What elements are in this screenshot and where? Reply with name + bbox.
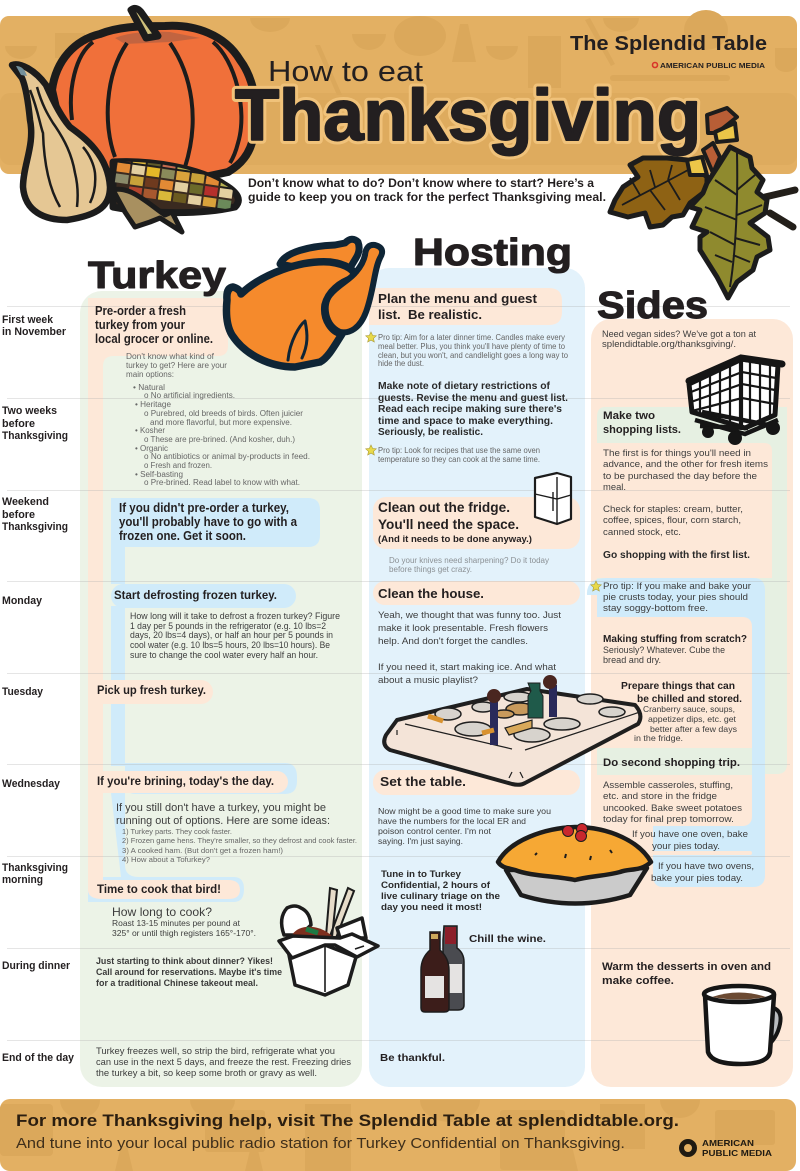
oven note: [632, 829, 754, 884]
shopping details: meal.: [603, 482, 626, 493]
fridge heading: (And it needs to be done anyway.): [378, 534, 532, 545]
pre-order heading: turkey from your: [95, 318, 185, 332]
turkey options list: o Pre-brined. Read label to know with what.: [144, 478, 300, 487]
text: hosting column: [378, 291, 569, 1064]
ER note: Now might be a good time to make sure you: [378, 806, 551, 816]
wine heading: Chill the wine.: [469, 933, 546, 945]
frozen turkey callout: If you didn't pre-order a turkey,: [119, 501, 289, 515]
turkey options list: o Fresh and frozen.: [144, 461, 212, 470]
dessert heading: [602, 961, 771, 987]
dietary note: [378, 380, 568, 438]
illustration: pie: [498, 824, 651, 904]
plan heading: [378, 291, 538, 322]
plan heading: list. Be realistic.: [378, 307, 482, 322]
timeline labels: End of the day: [2, 1052, 75, 1064]
timeline labels: in November: [2, 326, 67, 338]
shopping details: coffee, spices, flour, corn starch,: [603, 515, 741, 526]
defrost details: cool water (e.g. 10 lbs=5 hours, 20 lbs=10 hours). Be: [130, 640, 330, 650]
casserole note: [603, 780, 742, 825]
frozen turkey callout: frozen one. Get it soon.: [119, 529, 246, 543]
title: Thanksgiving: Thanksgiving: [235, 76, 701, 156]
casserole note: uncooked. Bake sweet potatoes: [603, 803, 742, 814]
last-resort ideas: 1) Turkey parts. They cook faster.: [122, 827, 232, 836]
defrost details: 1 day per 5 pounds in the refrigerator (e.g. 10 lbs=2: [130, 621, 326, 631]
shopping details: Check for staples: cream, butter,: [603, 504, 743, 515]
ER note: saying. I'm just saying.: [378, 836, 463, 846]
oven note: bake your pies today.: [651, 873, 743, 884]
frozen turkey callout: you'll probably have to go with a: [119, 515, 298, 529]
turkey options list: o These are pre-brined. (And kosher, duh.): [144, 435, 295, 444]
chill note: [621, 680, 742, 743]
house note: Yeah, we thought that was funny too. Just: [378, 610, 561, 621]
oven note: If you have one oven, bake: [632, 829, 748, 840]
title: how to eat: How to eat: [268, 56, 423, 88]
leftovers note: the turkey a bit, so keep some broth or gravy as well.: [96, 1068, 317, 1079]
stuffing note: [603, 633, 747, 665]
turkey options list: o No antibiotics or animal by-products in feed.: [144, 452, 310, 461]
turkey options list: • Natural: [133, 383, 165, 392]
logo: The Splendid Table: AMERICAN PUBLIC MEDIA: [660, 61, 766, 70]
chill note: in the fridge.: [634, 733, 683, 743]
timeline labels: before: [2, 418, 35, 430]
oven note: your pies today.: [652, 841, 720, 852]
house note: make it look presentable. Fresh flowers: [378, 623, 548, 634]
pre-order heading: [95, 304, 213, 346]
table heading: Set the table.: [380, 775, 466, 789]
defrost details: sure to change the cool water every half an hour.: [130, 650, 318, 660]
panel: hosting backgrounds: [369, 268, 585, 1087]
pie crust tip: stay soggy-bottom free.: [603, 603, 708, 614]
shopping details: to be purchased the day before the: [603, 471, 757, 482]
title: Thanksgiving: Thanksgiving: [235, 76, 701, 156]
brining heading: If you're brining, today's the day.: [97, 776, 274, 788]
timeline labels: [2, 314, 75, 1064]
vegan note: splendidtable.org/thanksgiving/.: [602, 339, 736, 349]
heading: Sides: Sides: [597, 285, 708, 327]
radio note: [381, 869, 500, 913]
last-resort ideas: 3) A cooked ham. (But don't get a frozen ham!): [122, 846, 284, 855]
house note: [378, 610, 561, 686]
chill note: appetizer dips, etc. get: [648, 714, 737, 724]
cook time: [112, 905, 256, 938]
illustration: roast turkey: [227, 239, 382, 367]
pro tip one: hide the dust.: [378, 359, 424, 368]
timeline labels: First week: [2, 314, 54, 326]
dinner note: Call around for reservations. Maybe it's time: [96, 967, 282, 978]
turkey options list: • Kosher: [135, 426, 165, 435]
shopping heading: [603, 410, 681, 436]
timeline labels: Thanksgiving: [2, 430, 68, 442]
turkey options list: Don't know what kind of: [126, 352, 215, 361]
chill note: Cranberry sauce, soups,: [643, 704, 735, 714]
thankful heading: Be thankful.: [380, 1052, 445, 1064]
fridge heading: Clean out the fridge.: [378, 500, 510, 515]
turkey options list: o Purebred, old breeds of birds. Often juicier: [144, 409, 303, 418]
shopping heading: Make two: [603, 410, 655, 422]
header banner: [0, 10, 797, 174]
footer headline: For more Thanksgiving help, visit The Splendid Table at splendidtable.org.: [16, 1111, 679, 1130]
timeline labels: Thanksgiving: [2, 521, 68, 533]
timeline labels: Tuesday: [2, 686, 44, 698]
time grid lines: [7, 306, 790, 1040]
defrost details: How long will it take to defrost a frozen turkey? Figure: [130, 611, 340, 621]
pick up heading: Pick up fresh turkey.: [97, 685, 206, 697]
illustration: pumpkin: [52, 8, 256, 178]
illustration: coffee mug: [704, 986, 781, 1064]
panel: turkey backgrounds: [80, 291, 362, 1087]
turkey options list: [126, 352, 310, 487]
cook time: Roast 13-15 minutes per pound at: [112, 918, 241, 928]
logo: The Splendid Table: The Splendid Table: [570, 33, 767, 55]
pie crust tip: Pro tip: If you make and bake your: [603, 581, 751, 592]
turkey options list: o No artificial ingredients.: [144, 391, 235, 400]
leftovers note: Turkey freezes well, so strip the bird, refrigerate what you: [96, 1046, 335, 1057]
illustration: fridge: [535, 473, 571, 524]
illustration: corn: [113, 152, 238, 232]
radio note: Confidential, 2 hours of: [381, 880, 491, 891]
shopping details: canned stock, etc.: [603, 527, 681, 538]
house heading: Clean the house.: [378, 587, 484, 601]
dinner note: Just starting to think about dinner? Yikes!: [96, 956, 273, 967]
last-resort ideas: 2) Frozen game hens. They're smaller, so they defrost and cook faster.: [122, 836, 357, 845]
logo: American Public Media: AMERICAN: [702, 1138, 754, 1148]
footer subline: And tune into your local public radio station for Turkey Confidential on Thanksgiving.: [16, 1135, 625, 1152]
house note: about a music playlist?: [378, 675, 478, 686]
dietary note: guests. Revise the menu and guest list.: [378, 392, 568, 404]
illustration: autumn leaves and acorns: [610, 108, 795, 298]
chill note: Prepare things that can: [621, 680, 735, 692]
last-resort ideas: If you still don't have a turkey, you might be: [116, 802, 326, 814]
leftovers note: [96, 1046, 351, 1079]
house note: help. And don't forget the candles.: [378, 636, 528, 647]
plan heading: Plan the menu and guest: [378, 291, 538, 306]
logo: The Splendid Table: [570, 33, 767, 70]
vegan note: Need vegan sides? We've got a ton at: [602, 329, 757, 339]
illustration: wine bottles: [421, 926, 464, 1012]
cook time: How long to cook?: [112, 905, 212, 919]
defrost heading: Start defrosting frozen turkey.: [114, 590, 277, 602]
pre-order heading: local grocer or online.: [95, 332, 213, 346]
timeline labels: Thanksgiving: [2, 862, 68, 874]
text: sides column: [602, 329, 771, 987]
defrost details: [130, 611, 340, 660]
pro tip one: clean, but you won't, and candlelight goes a long way to: [378, 351, 569, 360]
knives note: Do your knives need sharpening? Do it today: [389, 556, 549, 565]
turkey options list: • Heritage: [135, 400, 172, 409]
shopping details: The first is for things you'll need in: [603, 448, 751, 459]
first list heading: Go shopping with the first list.: [603, 550, 750, 561]
last-resort ideas: running out of options. Here are some ideas:: [116, 815, 330, 827]
intro text: Don’t know what to do? Don’t know where to start? Here’s a: [248, 176, 594, 190]
casserole note: etc. and store in the fridge: [603, 791, 717, 802]
illustration: gourd: [12, 64, 110, 220]
illustration: takeout box: [279, 888, 378, 995]
intro text: guide to keep you on track for the perfect Thanksgiving meal.: [248, 190, 606, 204]
stuffing note: Seriously? Whatever. Cube the: [603, 645, 725, 655]
pro tip one: meal better. Plus, you think you'll have plenty of time to: [378, 342, 566, 351]
panel: sides backgrounds: [587, 319, 793, 1087]
pro tip two: [378, 446, 540, 464]
casserole note: Assemble casseroles, stuffing,: [603, 780, 733, 791]
pro tip two: Pro tip: Look for recipes that use the same oven: [378, 446, 540, 455]
house note: If you need it, start making ice. And what: [378, 662, 556, 673]
timeline labels: Two weeks: [2, 405, 57, 417]
fridge heading: You'll need the space.: [378, 517, 519, 532]
leftovers note: can use in the next 5 days, and freeze the rest. Freezing dries: [96, 1057, 351, 1068]
radio note: day you need it most!: [381, 902, 482, 913]
pro tip one: [378, 333, 569, 368]
turkey options list: main options:: [126, 370, 174, 379]
pro tip one: Pro tip: Aim for a later dinner time. Candles make every: [378, 333, 565, 342]
cook heading: Time to cook that bird!: [97, 884, 221, 896]
shopping details: [603, 448, 768, 538]
dietary note: Seriously, be realistic.: [378, 426, 483, 438]
heading: Hosting: Hosting: [413, 232, 572, 274]
pre-order heading: Pre-order a fresh: [95, 304, 186, 318]
heading: Turkey: Turkey: [88, 255, 226, 297]
timeline labels: During dinner: [2, 960, 71, 972]
dietary note: Read each recipe making sure there's: [378, 403, 562, 415]
turkey options list: and more flavorful, but more expensive.: [150, 418, 292, 427]
illustration: shopping cart: [689, 358, 782, 445]
timeline labels: before: [2, 509, 35, 521]
cook time: 325° or until thigh registers 165°-170°.: [112, 928, 256, 938]
illustration: set table: [384, 675, 640, 785]
dinner note: [96, 956, 282, 989]
turkey options list: • Self-basting: [135, 470, 183, 479]
second trip heading: Do second shopping trip.: [603, 757, 740, 769]
chill note: better after a few days: [650, 724, 737, 734]
last-resort ideas: 4) How about a Tofurkey?: [122, 855, 210, 864]
radio note: Tune in to Turkey: [381, 869, 462, 880]
footer banner: [0, 1099, 796, 1171]
text: turkey column: [95, 304, 357, 1079]
pie crust tip: pie crusts today, your pies should: [603, 592, 748, 603]
logo: American Public Media: PUBLIC MEDIA: [702, 1148, 772, 1158]
oven note: If you have two ovens,: [658, 861, 754, 872]
ER note: poison control center. I'm not: [378, 826, 492, 836]
timeline labels: Weekend: [2, 496, 49, 508]
knives note: [389, 556, 549, 574]
dessert heading: make coffee.: [602, 975, 674, 987]
chill note: be chilled and stored.: [637, 693, 742, 705]
stuffing note: Making stuffing from scratch?: [603, 633, 747, 645]
intro text: [248, 176, 606, 204]
casserole note: today for final prep tomorrow.: [603, 814, 734, 825]
dietary note: time and space to make everything.: [378, 415, 553, 427]
turkey options list: turkey to get? Here are your: [126, 361, 227, 370]
icon: pro tip stars: [366, 332, 601, 591]
fridge heading: [378, 500, 532, 545]
last-resort ideas: [116, 802, 357, 864]
turkey options list: • Organic: [135, 444, 168, 453]
ER note: have the numbers for the local ER and: [378, 816, 526, 826]
ER note: [378, 806, 551, 846]
frozen turkey callout: [119, 501, 298, 543]
pie crust tip: [603, 581, 751, 614]
timeline labels: Monday: [2, 595, 43, 607]
shopping heading: shopping lists.: [603, 424, 681, 436]
dinner note: for a traditional Chinese takeout meal.: [96, 978, 258, 989]
shopping details: advance, and the other for fresh items: [603, 459, 768, 470]
logo: American Public Media: [682, 1138, 772, 1158]
stuffing note: bread and dry.: [603, 655, 661, 665]
timeline labels: Wednesday: [2, 778, 61, 790]
vegan note: [602, 329, 757, 349]
dietary note: Make note of dietary restrictions of: [378, 380, 550, 392]
timeline labels: morning: [2, 874, 43, 886]
defrost details: days, 20 lbs=4 days), or half an hour per 5 pounds in: [130, 630, 333, 640]
radio note: live culinary triage on the: [381, 891, 500, 902]
dessert heading: Warm the desserts in oven and: [602, 961, 771, 973]
knives note: before things get crazy.: [389, 565, 472, 574]
pro tip two: temperature so they can cook at the same time.: [378, 455, 540, 464]
